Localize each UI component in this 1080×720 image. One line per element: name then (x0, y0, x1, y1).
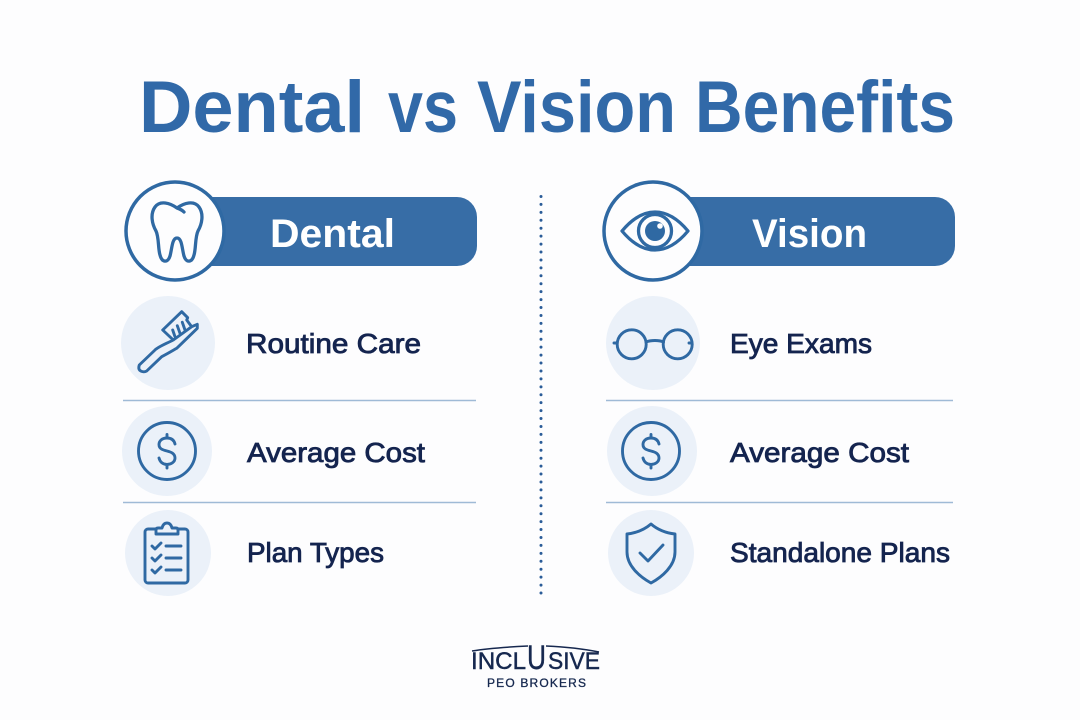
title: Vision (477, 67, 676, 148)
logo: INCL (471, 648, 526, 675)
row: standalone plans: Standalone Plans (730, 537, 950, 568)
row: standalone plans (608, 510, 950, 596)
panel: dental (121, 182, 477, 596)
row: average cost: Average Cost (730, 437, 909, 468)
row: routine care (121, 296, 421, 390)
title: Dental (139, 67, 365, 148)
row: plan types (125, 510, 384, 596)
vision header (604, 182, 955, 280)
row: average cost (122, 406, 425, 496)
title: Benefits (695, 67, 955, 148)
logo: SIVE (548, 648, 600, 675)
title: vs (388, 67, 458, 148)
logo (471, 639, 600, 690)
dental header (126, 182, 477, 280)
dental header: Dental (270, 212, 395, 256)
row: eye exams: Eye Exams (730, 328, 872, 359)
panel: vision (604, 182, 955, 596)
row: routine care: Routine Care (246, 328, 421, 359)
title (139, 67, 955, 148)
logo: U (527, 639, 546, 677)
row: average cost (607, 406, 909, 496)
vision header: Vision (752, 212, 867, 256)
logo: PEO BROKERS (487, 676, 586, 690)
row: eye exams (606, 296, 872, 390)
row: average cost: Average Cost (247, 437, 425, 468)
row: plan types: Plan Types (247, 537, 384, 568)
